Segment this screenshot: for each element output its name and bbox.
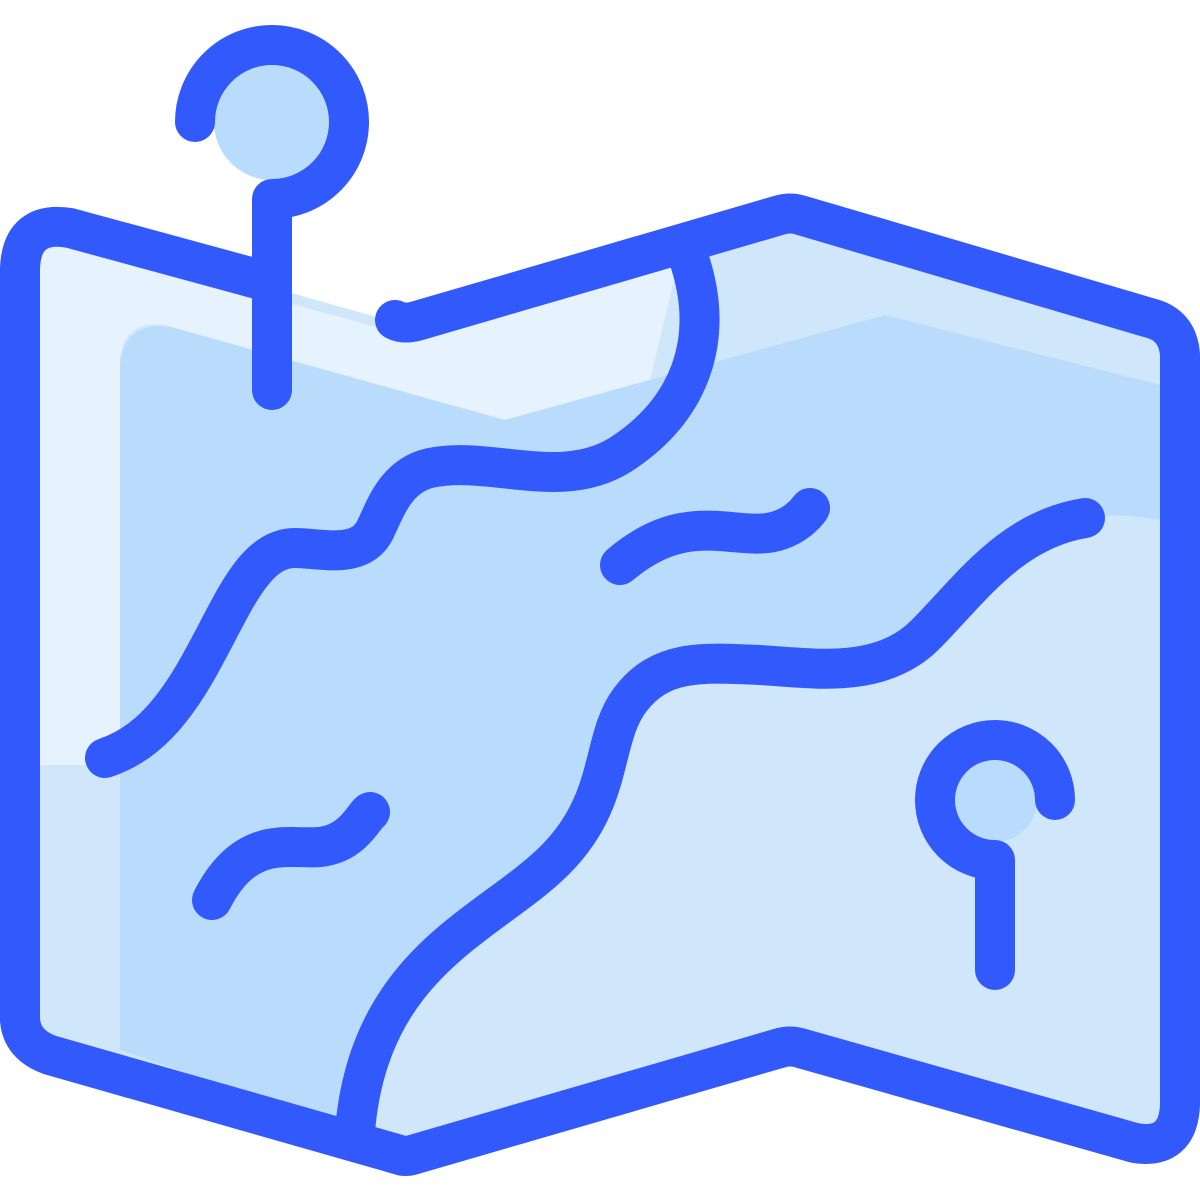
icon: top pin: [195, 45, 349, 390]
darker middle region: [120, 315, 1160, 1130]
map outline: [20, 214, 1180, 1156]
squiggle left: [212, 812, 370, 900]
map fill base: [20, 212, 1180, 1158]
river upper: [105, 262, 699, 758]
river lower: [355, 518, 1085, 1130]
squiggle right: [620, 508, 810, 565]
icon: bottom pin: [935, 740, 1055, 970]
lighter top-left band: [40, 240, 680, 765]
